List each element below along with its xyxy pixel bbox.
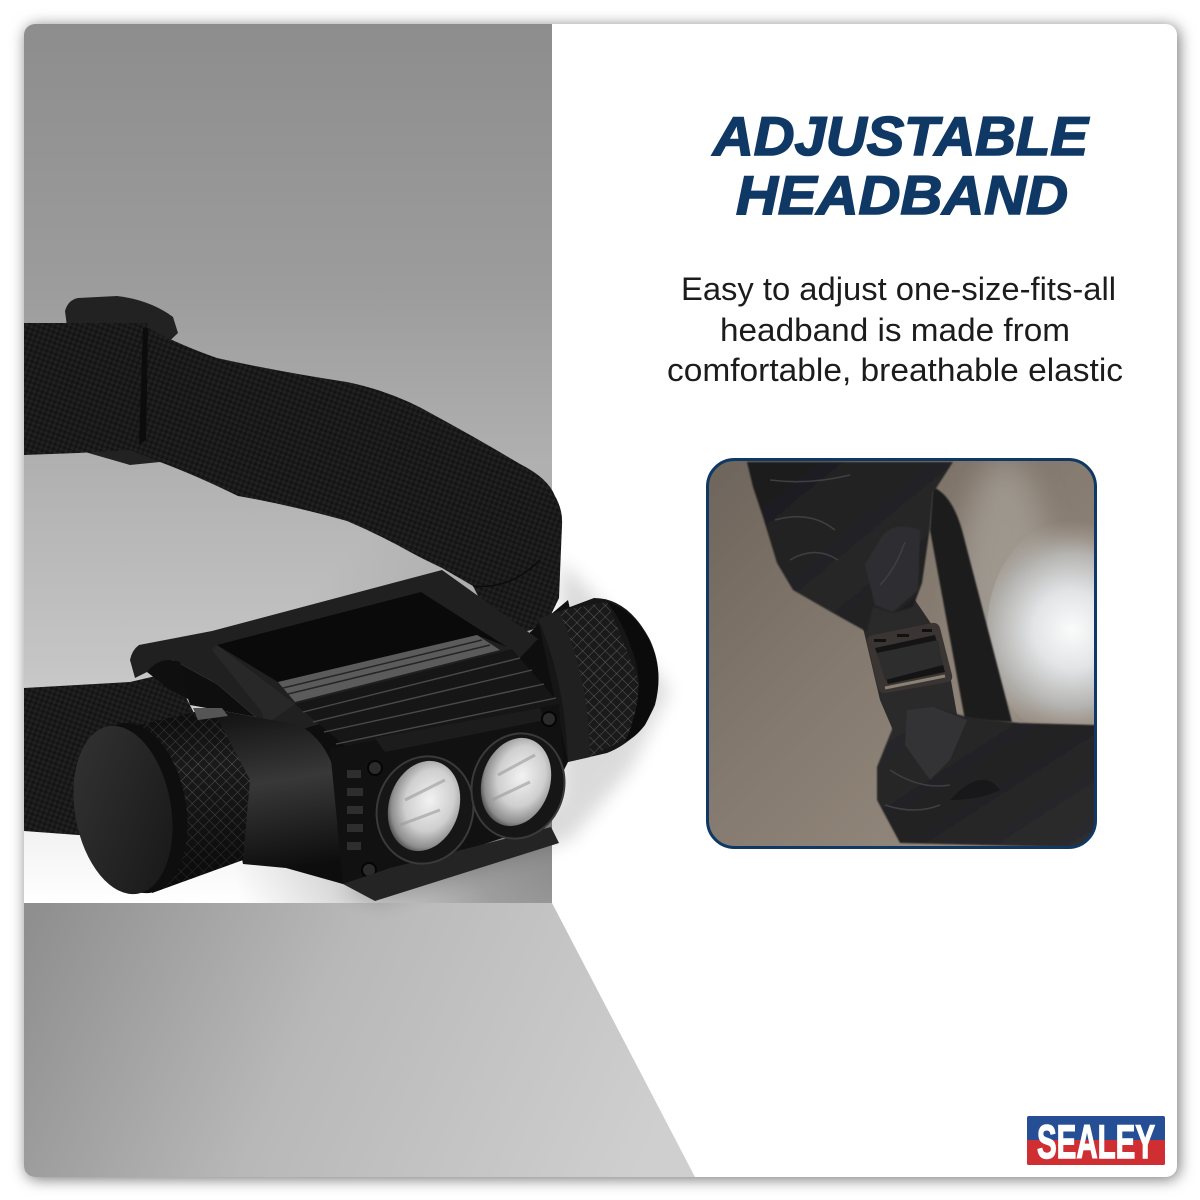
headband upper strap: [24, 296, 562, 640]
panel: grey floor light beam: [24, 903, 695, 1177]
photo: headlamp product: [24, 296, 670, 905]
mounting clip: [343, 827, 559, 901]
lamp body silhouette: [173, 600, 600, 884]
lamp soft shadow: [340, 560, 670, 905]
ribbed top of lamp body: [212, 645, 564, 755]
upper glove: [747, 462, 953, 632]
front strap: [863, 600, 957, 730]
photo: gloved hands adjusting strap buckle: [706, 458, 1097, 849]
body text: Easy to adjust one-size-fits-all: [681, 271, 1116, 307]
right cylinder and end cap: [538, 598, 659, 762]
panel: grey backdrop wall: [24, 24, 552, 903]
heading: HEADBAND: [736, 164, 1068, 226]
bracket holder: [130, 570, 538, 730]
twin lenses: [365, 723, 576, 875]
left knurled cylinder: [130, 708, 250, 893]
rear strap: [930, 487, 1012, 722]
buckle: [867, 623, 952, 693]
left neck: [212, 709, 343, 884]
lamp front face: [330, 704, 564, 884]
body text: [667, 271, 1123, 388]
heading: [711, 105, 1090, 226]
headband lower strap: [24, 672, 195, 835]
body text: headband is made from: [720, 312, 1070, 348]
lower glove: [877, 707, 1096, 848]
left end cap: [61, 715, 200, 902]
heading: ADJUSTABLE: [711, 105, 1090, 167]
body text: comfortable, breathable elastic: [667, 352, 1123, 388]
photo frame border: [708, 460, 1096, 848]
